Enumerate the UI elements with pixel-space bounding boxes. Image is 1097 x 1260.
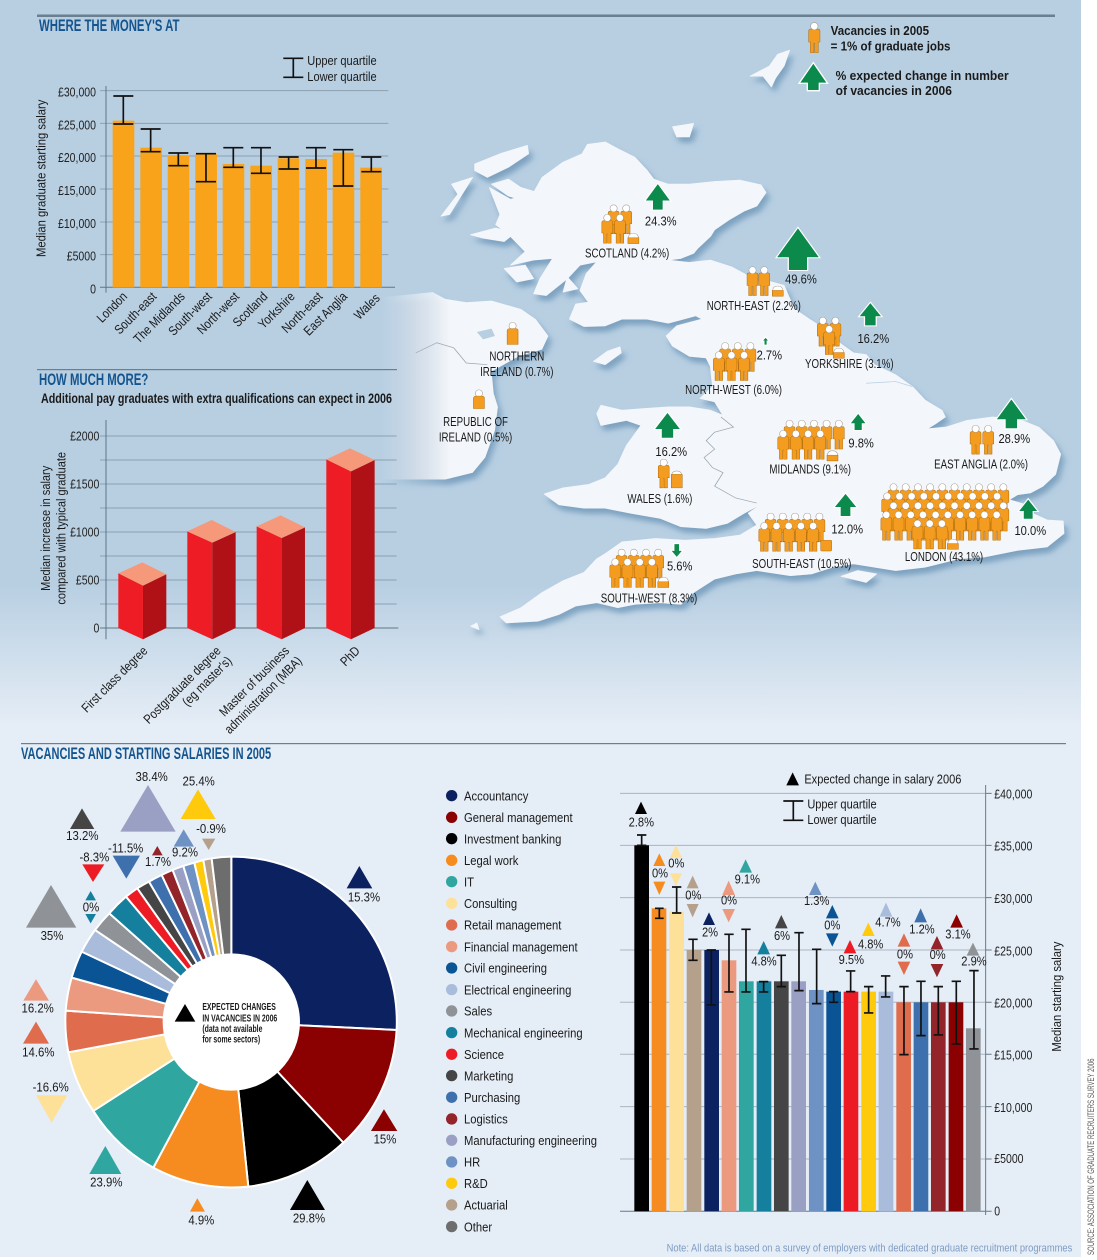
- map labels: [439, 214, 1046, 606]
- bar chart: starting salary by sector: 0: [994, 1203, 1001, 1219]
- legend: sectors: Manufacturing engineering: [464, 1133, 597, 1148]
- bar chart: extra qualifications: (eg master's): [179, 653, 235, 709]
- bar chart: salaries by region: South-east: [111, 289, 160, 337]
- bar chart: extra qualifications: Median increase in salary: [38, 466, 53, 591]
- legend text: vacancies: [831, 23, 951, 54]
- bar chart: starting salary by sector: £35,000: [994, 839, 1033, 854]
- map labels: NORTH-EAST (2.2%): [707, 300, 801, 313]
- bar chart: starting salary by sector: Note: All data is based on a survey of employers with dedicated graduate recruitment programmes: [667, 1243, 1072, 1255]
- bar chart: starting salary by sector: Median starting salary: [1049, 941, 1064, 1052]
- salary change labels: 6%: [774, 928, 790, 943]
- salary change labels: 4.7%: [875, 915, 901, 930]
- bar chart: salaries by region: 0: [90, 281, 96, 297]
- salary change labels: 1.3%: [804, 893, 830, 908]
- donut change labels: -11.5%: [108, 841, 144, 855]
- bar chart: salaries by region: Wales: [351, 291, 383, 323]
- donut chart: vacancies by sector: [22, 769, 397, 1227]
- map labels: SOUTH-WEST (8.3%): [601, 592, 697, 606]
- bar chart: salaries by region: North-west: [194, 289, 243, 337]
- map labels: 16.2%: [655, 444, 687, 459]
- legend: sectors: Actuarial: [464, 1198, 508, 1213]
- map labels: 9.8%: [848, 436, 874, 451]
- legend text: vacancies: Vacancies in 2005: [831, 23, 929, 38]
- bar chart: extra qualifications: Master of business: [216, 643, 292, 719]
- bar chart: salaries by region: Scotland: [230, 289, 271, 330]
- salary change labels: 9.1%: [735, 872, 760, 887]
- map labels: NORTH-WEST (6.0%): [685, 384, 782, 397]
- salary change labels: [629, 815, 987, 969]
- legend text: expected change: of vacancies in 2006: [836, 84, 952, 98]
- bar chart: salaries by region: East Anglia: [301, 289, 350, 339]
- bar chart: starting salary by sector: £10,000: [994, 1100, 1033, 1115]
- map of Britain and Ireland: [382, 50, 1064, 630]
- salary change labels: 4.8%: [858, 937, 884, 951]
- donut change labels: 29.8%: [293, 1211, 325, 1225]
- bar chart: starting salary by sector: [620, 771, 1072, 1255]
- legend: sectors: Sales: [464, 1004, 492, 1019]
- donut change labels: 15.3%: [348, 890, 380, 905]
- donut change labels: [22, 769, 397, 1227]
- map labels: WALES (1.6%): [627, 493, 693, 506]
- donut change labels: 0%: [83, 900, 100, 915]
- map labels: MIDLANDS (9.1%): [769, 463, 851, 477]
- legend: sectors: Electrical engineering: [464, 983, 571, 998]
- salary change labels: 0%: [897, 947, 913, 961]
- legend: sectors: IT: [464, 875, 475, 890]
- legend: sectors: Consulting: [464, 896, 517, 911]
- icon: person: [809, 22, 820, 53]
- legend: sectors: [446, 789, 597, 1234]
- bar chart: starting salary by sector: Upper quartile: [807, 796, 877, 812]
- bar chart: extra qualifications: 0: [93, 621, 100, 636]
- donut change labels: 16.2%: [22, 1001, 54, 1015]
- legend: sectors: Legal work: [464, 853, 519, 868]
- bar chart: salaries by region: [34, 53, 395, 346]
- bar chart: salaries by region: £20,000: [58, 150, 96, 165]
- arrows: expected change: [645, 183, 1038, 558]
- salary change labels: 1.2%: [909, 922, 935, 937]
- salary change triangles: [635, 802, 979, 977]
- bar chart: salaries by region: Upper quartile: [307, 53, 377, 68]
- map labels: 49.6%: [785, 272, 817, 287]
- map labels: LONDON (43.1%): [905, 551, 983, 565]
- donut change labels: -0.9%: [196, 821, 226, 836]
- salary change labels: 0%: [824, 918, 841, 933]
- map labels: YORKSHIRE (3.1%): [805, 358, 894, 371]
- bar chart: starting salary by sector: £20,000: [994, 996, 1033, 1011]
- map labels: NORTHERN: [489, 350, 544, 364]
- bar chart: extra qualifications: Postgraduate degree: [140, 643, 224, 727]
- donut change labels: 38.4%: [136, 769, 168, 784]
- bar chart: salaries by region: Lower quartile: [307, 69, 377, 84]
- donut change labels: 1.7%: [145, 854, 171, 869]
- bar chart: salaries by region: South-west: [165, 289, 215, 339]
- icon: green arrow: [799, 63, 828, 91]
- map labels: 5.6%: [667, 559, 693, 574]
- legend: sectors: Mechanical engineering: [464, 1026, 583, 1041]
- source note: SOURCE: ASSOCIATION OF GRADUATE RECRUITERS SURVEY 2006: [1086, 1059, 1096, 1255]
- map labels: 2.7%: [757, 348, 782, 363]
- bar chart: starting salary by sector: £15,000: [994, 1048, 1033, 1063]
- legend: sectors: Marketing: [464, 1069, 513, 1084]
- donut change labels: 25.4%: [183, 774, 215, 789]
- borders: [704, 417, 757, 503]
- salary change labels: 0%: [685, 888, 702, 903]
- map labels: 10.0%: [1014, 523, 1046, 538]
- bar chart: salaries by region: £10,000: [58, 216, 96, 231]
- salary change labels: 0%: [721, 893, 737, 908]
- bar chart: salaries by region: £30,000: [58, 85, 96, 100]
- donut chart: vacancies by sector: for some sectors): [202, 1033, 260, 1045]
- heading: where the money's at: WHERE THE MONEY'S AT: [39, 17, 180, 36]
- legend: sectors: Logistics: [464, 1112, 508, 1127]
- bar chart: extra qualifications: £1000: [70, 525, 100, 540]
- donut change labels: -8.3%: [79, 850, 109, 864]
- donut change labels: 9.2%: [172, 845, 198, 860]
- heading: how much more?: [37, 369, 397, 406]
- heading: how much more?: HOW MUCH MORE?: [39, 371, 148, 390]
- legend text: vacancies: = 1% of graduate jobs: [831, 39, 951, 54]
- map legend: [799, 22, 1009, 98]
- salary change labels: 4.8%: [751, 954, 777, 969]
- donut change labels: 15%: [374, 1132, 397, 1146]
- legend text: expected change: [836, 69, 1009, 98]
- legend: sectors: HR: [464, 1155, 480, 1170]
- salary change labels: 0%: [668, 856, 685, 871]
- map labels: 16.2%: [857, 331, 889, 346]
- bar chart: salaries by region: Median graduate starting salary: [34, 99, 49, 257]
- map labels: 12.0%: [831, 522, 863, 537]
- bar chart: extra qualifications: PhD: [337, 643, 363, 669]
- landmass: Ireland: [382, 292, 548, 479]
- bar chart: starting salary by sector: £25,000: [994, 943, 1033, 959]
- bar chart: extra qualifications: First class degree: [78, 643, 151, 716]
- legend: sectors: Financial management: [464, 940, 578, 955]
- map labels: 28.9%: [998, 431, 1030, 446]
- legend: sectors: Investment banking: [464, 832, 561, 847]
- legend text: expected change: % expected change in number: [836, 69, 1009, 83]
- bar chart: starting salary by sector: £5000: [994, 1151, 1024, 1166]
- map labels: IRELAND (0.5%): [439, 431, 512, 445]
- bar chart: extra qualifications: £1500: [70, 477, 100, 492]
- donut change labels: 35%: [41, 928, 64, 943]
- donut change labels: -16.6%: [33, 1080, 69, 1095]
- bar chart: salaries by region: The Midlands: [130, 289, 188, 346]
- donut chart: vacancies by sector: (data not available: [202, 1023, 263, 1034]
- map labels: EAST ANGLIA (2.0%): [934, 458, 1028, 472]
- salary change labels: 3.1%: [945, 927, 971, 942]
- legend: sectors: Other: [464, 1220, 492, 1234]
- donut change labels: 14.6%: [22, 1045, 55, 1060]
- map labels: SCOTLAND (4.2%): [585, 248, 669, 261]
- bar chart: salaries by region: £15,000: [58, 183, 96, 198]
- donut change labels: 23.9%: [90, 1175, 123, 1190]
- heading: vacancies and starting salaries: VACANCIES AND STARTING SALARIES IN 2005: [21, 744, 271, 763]
- donut change labels: 4.9%: [188, 1213, 215, 1227]
- salary change labels: 0%: [930, 947, 946, 962]
- bar chart: salaries by region: London: [94, 289, 130, 326]
- donut chart: vacancies by sector: EXPECTED CHANGES: [202, 1001, 276, 1012]
- bar chart: starting salary by sector: £40,000: [994, 787, 1033, 802]
- bar chart: extra qualifications: £2000: [70, 429, 100, 444]
- bar chart: extra qualifications: compared with typical graduate: [54, 452, 69, 605]
- bar chart: extra qualifications: administration (MBA): [221, 653, 305, 737]
- donut chart: vacancies by sector: IN VACANCIES IN 2006: [202, 1012, 277, 1024]
- map labels: REPUBLIC OF: [443, 416, 508, 430]
- legend: sectors: Retail management: [464, 918, 562, 933]
- donut change triangles: [23, 785, 397, 1212]
- bar chart: starting salary by sector: Expected change in salary 2006: [804, 771, 962, 787]
- map labels: 24.3%: [645, 214, 677, 229]
- map labels: IRELAND (0.7%): [480, 366, 554, 379]
- bar chart: extra qualifications: £500: [76, 573, 100, 588]
- legend: sectors: Purchasing: [464, 1090, 520, 1105]
- icons: vacancy people: [473, 205, 1009, 587]
- bar chart: salaries by region: Yorkshire: [255, 289, 298, 332]
- legend: sectors: Civil engineering: [464, 961, 547, 976]
- salary change labels: 2%: [702, 925, 718, 940]
- salary change labels: 9.5%: [839, 952, 864, 967]
- bar chart: starting salary by sector: £30,000: [994, 891, 1033, 906]
- landmass: Great Britain and islands: [441, 50, 1064, 630]
- legend: sectors: Accountancy: [464, 789, 529, 804]
- bar chart: extra qualifications: [38, 420, 398, 737]
- legend: sectors: General management: [464, 810, 573, 825]
- salary change labels: 0%: [652, 866, 668, 881]
- donut change labels: 13.2%: [66, 828, 99, 843]
- map labels: SOUTH-EAST (10.5%): [752, 558, 851, 571]
- bar chart: salaries by region: £25,000: [58, 117, 96, 133]
- bar chart: salaries by region: North-east: [278, 289, 326, 336]
- legend: sectors: Science: [464, 1047, 504, 1062]
- legend: sectors: R&D: [464, 1176, 488, 1191]
- bar chart: starting salary by sector: Lower quartile: [807, 812, 877, 827]
- salary change labels: 2.9%: [961, 954, 987, 968]
- bar chart: salaries by region: £5000: [67, 249, 96, 264]
- salary change labels: 2.8%: [629, 815, 654, 830]
- heading: how much more?: Additional pay graduates with extra qualifications can expect in 2006: [41, 391, 392, 406]
